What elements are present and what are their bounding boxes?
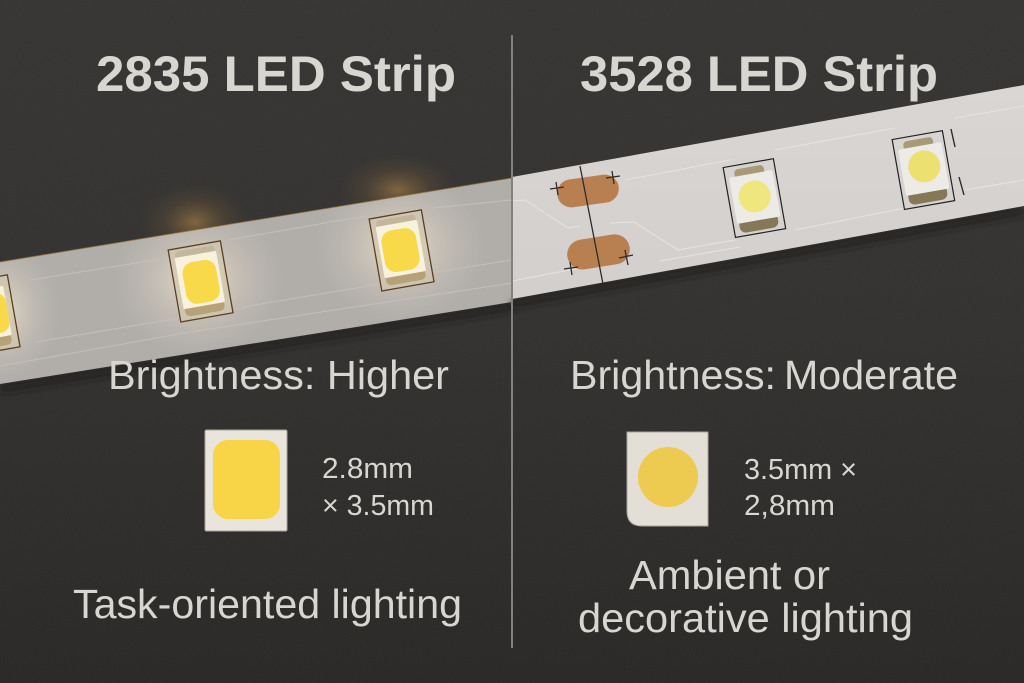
text: 2835 dimensions: × 3.5mm bbox=[322, 490, 434, 522]
LED 1 bbox=[168, 241, 233, 322]
panel: 2835 LED strip bbox=[0, 154, 512, 392]
text: brightness moderate bbox=[570, 352, 958, 398]
plus marks bbox=[550, 171, 633, 275]
icon: 2835 chip bbox=[205, 430, 287, 531]
strip top edge highlight bbox=[0, 178, 512, 262]
solder pad: upper bbox=[555, 173, 621, 209]
text: 3528 dimensions bbox=[744, 454, 857, 522]
strip body bbox=[512, 85, 1024, 299]
text: 2835 dimensions bbox=[322, 453, 434, 522]
heading: 2835 LED Strip: 2835 LED Strip bbox=[96, 46, 456, 102]
text: 3528 dimensions: 2,8mm bbox=[744, 490, 835, 522]
LED 2 bbox=[369, 210, 434, 291]
strip shadow bbox=[0, 304, 512, 392]
glow behind strip bbox=[140, 154, 458, 260]
icon: 3528 chip bbox=[627, 432, 708, 526]
strip body bbox=[0, 178, 512, 384]
polarity ticks bbox=[951, 129, 964, 195]
text: brightness moderate: Moderate bbox=[784, 352, 958, 398]
text: 2835 dimensions: 2.8mm bbox=[322, 453, 413, 485]
divider bbox=[511, 35, 513, 648]
LED B bbox=[892, 131, 955, 209]
LED A bbox=[723, 159, 786, 237]
PCB traces bbox=[512, 106, 1024, 281]
text: ambient use: Ambient or bbox=[629, 552, 830, 598]
warm light on strip bbox=[0, 194, 511, 366]
text: brightness higher: Brightness: Higher bbox=[108, 352, 449, 398]
heading: 3528 LED Strip: 3528 LED Strip bbox=[580, 46, 938, 102]
cut line bbox=[580, 166, 603, 284]
LED 0 bbox=[0, 275, 20, 356]
text: task-oriented use: Task-oriented lighting bbox=[73, 581, 462, 627]
text: 3528 dimensions: 3.5mm × bbox=[744, 454, 857, 486]
panel: 3528 LED strip bbox=[512, 85, 1024, 307]
solder pad: lower bbox=[565, 232, 632, 272]
text: ambient use: decorative lighting bbox=[578, 595, 913, 641]
text: brightness moderate: Brightness: bbox=[570, 352, 776, 398]
strip shadow bbox=[512, 208, 1024, 307]
text: ambient use bbox=[578, 552, 913, 641]
